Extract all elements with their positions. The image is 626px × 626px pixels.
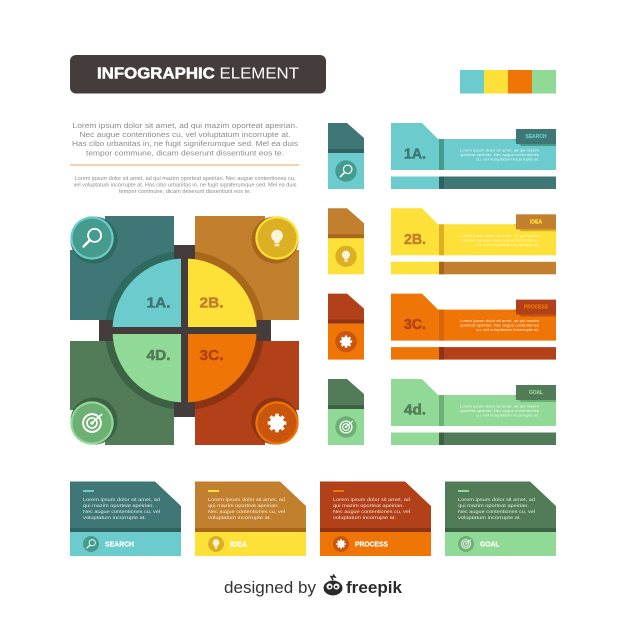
banner: 4d goal: GOAL xyxy=(529,390,543,396)
intro text block: tempor commune, dicam deserunt dissentiunt eos te. xyxy=(86,148,284,158)
bottom card: goal: GOAL xyxy=(480,542,500,548)
banner: 2B idea: 2B. xyxy=(404,232,426,248)
bottom card: process: Nec augue contentiones cu, vel xyxy=(333,509,410,515)
segment 4D: 4D. xyxy=(146,348,170,364)
segment 2B xyxy=(184,258,256,330)
banner: 4d goal xyxy=(391,379,556,445)
segment 1A xyxy=(112,258,184,330)
colour palette xyxy=(460,70,556,94)
bottom card: search: Nec augue contentiones cu, vel xyxy=(83,509,160,515)
banner: 3C process: PROCESS xyxy=(524,305,549,311)
banner: 3C process: oporteat apeirian. Nec augue contentiones xyxy=(460,324,539,328)
segment 4D xyxy=(112,330,184,402)
banner: 4d goal: 4d. xyxy=(404,402,426,418)
bottom card: idea: voluptatum incorrupte at. xyxy=(208,515,271,521)
title bar: INFOGRAPHIC ELEMENT xyxy=(97,66,299,82)
bottom card: search: Lorem ipsum dolor sit amet, ad xyxy=(83,497,160,503)
segment 3C xyxy=(184,330,256,402)
banner: 3C process: 3C. xyxy=(404,317,426,333)
bottom card: goal: qui mazim oporteat apeirian. xyxy=(458,503,529,509)
intro text block: Has cibo urbanitas in, ne fugit signiferumque sed. Mel ea duis xyxy=(72,139,298,148)
banner: 4d goal: cu, vel voluptatum incorrupte at. xyxy=(476,414,539,418)
banner: 2B idea: IDEA xyxy=(530,219,543,225)
bottom card: goal: voluptatum incorrupte at. xyxy=(458,515,521,521)
segment 2B: 2B. xyxy=(200,296,224,312)
small card: search xyxy=(328,123,364,189)
icon: light bulb xyxy=(252,216,299,264)
icon: magnifier xyxy=(70,216,118,264)
bottom card: process: PROCESS xyxy=(355,542,388,548)
panel: brick quadrant xyxy=(195,341,299,445)
segment 3C: 3C. xyxy=(200,348,224,364)
intro text block: Nec augue contentiones cu, vel voluptatum incorrupte at. xyxy=(80,130,290,139)
banner: 2B idea xyxy=(391,208,556,274)
panel: brown quadrant xyxy=(195,216,299,320)
bottom card: search: SEARCH xyxy=(105,542,134,548)
icon: freepik logo xyxy=(324,574,342,596)
bottom card: search xyxy=(70,482,181,556)
intro text block: tempor commune, dicam deserunt dissentiunt eos te. xyxy=(119,189,251,195)
bottom card: search: voluptatum incorrupte at. xyxy=(83,515,146,521)
bottom card: idea: Nec augue contentiones cu, vel xyxy=(208,509,285,515)
banner: 1A search: oporteat apeirian. Nec augue contentiones xyxy=(460,153,539,157)
bottom card: idea xyxy=(195,482,306,556)
bottom card: process xyxy=(320,482,431,556)
intro text block: Lorem ipsum dolor sit amet, ad qui mazim oporteat apeirian. xyxy=(72,121,298,130)
banner: 1A search: Lorem ipsum dolor sit amet, ad qui mazim xyxy=(460,148,539,152)
banner: 4d goal: Lorem ipsum dolor sit amet, ad qui mazim xyxy=(460,404,539,408)
banner: 3C process: cu, vel voluptatum incorrupte at. xyxy=(476,328,539,332)
cross bars xyxy=(106,252,263,409)
panel: teal quadrant xyxy=(70,216,174,320)
bottom card: idea: IDEA xyxy=(230,542,247,548)
cross connector xyxy=(99,245,271,417)
banner: 1A search: 1A. xyxy=(404,146,426,162)
banner: 1A search xyxy=(391,123,556,189)
banner: 3C process: Lorem ipsum dolor sit amet, ad qui mazim xyxy=(460,319,539,323)
bottom card: process: voluptatum incorrupte at. xyxy=(333,515,396,521)
freepik credit: designed by xyxy=(224,578,316,597)
intro text block xyxy=(70,121,299,195)
small card: process xyxy=(328,294,364,360)
banner: 2B idea: Lorem ipsum dolor sit amet, ad qui mazim xyxy=(460,234,539,238)
banner: 2B idea: cu, vel voluptatum incorrupte at. xyxy=(476,243,539,247)
bottom card: idea: Lorem ipsum dolor sit amet, ad xyxy=(208,497,285,503)
title bar xyxy=(70,55,326,94)
intro text block: vel voluptatum incorrupte at. Has cibo urbanitas in, ne fugit signiferumque sed. Mel ea duis xyxy=(74,182,297,188)
bottom card: search: qui mazim oporteat apeirian. xyxy=(83,503,154,509)
panel: green quadrant xyxy=(70,341,174,445)
dark ring xyxy=(105,251,264,410)
small card: idea xyxy=(328,208,364,274)
bottom card: idea: qui mazim oporteat apeirian. xyxy=(208,503,279,509)
bottom card: process: qui mazim oporteat apeirian. xyxy=(333,503,404,509)
intro text block: Lorem ipsum dolor sit amet, ad qui mazim oporteat apeirian. Nec augue contentiones cu, xyxy=(74,176,296,182)
freepik credit: freepik xyxy=(346,578,403,597)
bottom card: process: Lorem ipsum dolor sit amet, ad xyxy=(333,497,410,503)
small card: goal xyxy=(328,379,364,445)
bottom card: goal xyxy=(445,482,556,556)
icon: gear xyxy=(252,398,299,445)
bottom card: goal: Nec augue contentiones cu, vel xyxy=(458,509,535,515)
banner: 3C process xyxy=(391,294,556,360)
central quadrant diagram xyxy=(70,216,299,445)
banner: 4d goal: oporteat apeirian. Nec augue contentiones xyxy=(460,409,539,413)
icon: target xyxy=(70,398,118,445)
freepik credit xyxy=(224,574,403,597)
banner: 1A search: cu, vel voluptatum incorrupte at. xyxy=(476,158,539,162)
segment 1A: 1A. xyxy=(146,296,170,312)
bottom card: goal: Lorem ipsum dolor sit amet, ad xyxy=(458,497,535,503)
banner: 2B idea: oporteat apeirian. Nec augue contentiones xyxy=(460,238,539,242)
banner: 1A search: SEARCH xyxy=(526,134,547,140)
